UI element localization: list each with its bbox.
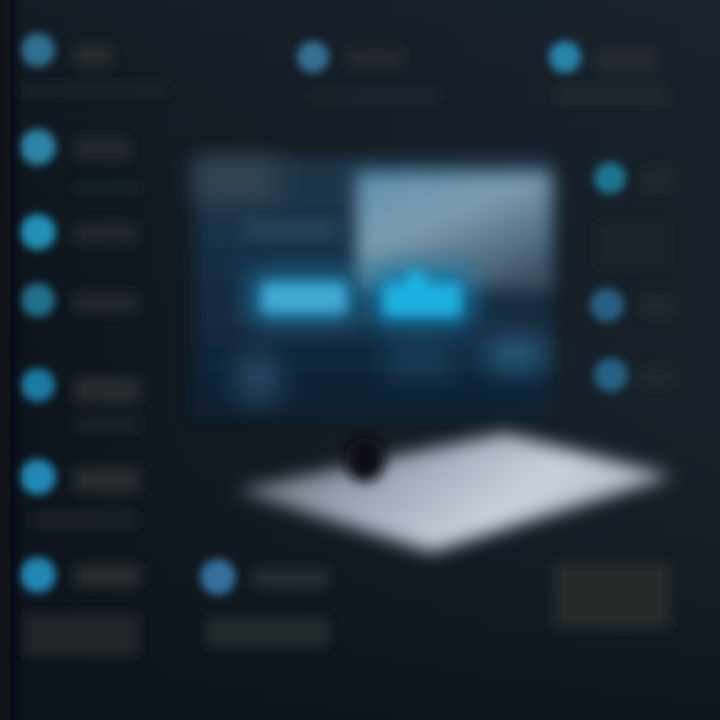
icon: left circle 7	[20, 557, 56, 593]
icon: left circle 5	[21, 368, 55, 402]
icon: right circle 2	[590, 288, 624, 322]
bright bar one glow	[250, 272, 358, 324]
monitor left top corner	[196, 160, 276, 200]
icon: left circle 3	[20, 214, 56, 250]
screen upper text row	[242, 222, 338, 238]
left edge shadow	[0, 0, 10, 720]
icons: blue circles	[20, 33, 628, 595]
icon: bottom circle	[200, 559, 236, 595]
icon: dark object on tablet	[345, 438, 385, 482]
screen glare panel	[356, 172, 552, 290]
bright bar one	[262, 283, 346, 313]
bright bar two	[384, 270, 460, 316]
icon: left circle 6	[20, 459, 56, 495]
icon: left circle 1	[21, 33, 55, 67]
icon: left circle 2	[20, 129, 56, 165]
panel: top and right text placeholders	[312, 47, 673, 387]
icon: tablet surface	[236, 433, 672, 552]
panel: monitor screen	[195, 158, 552, 416]
icon: right circle 1	[594, 162, 626, 194]
icon: top circle 2	[549, 41, 581, 73]
icon: left circle 4	[21, 283, 55, 317]
screen lower blocks	[238, 338, 545, 400]
panel: left column text placeholders	[20, 44, 170, 656]
icon: right circle 3	[594, 358, 628, 392]
panel: bottom text placeholders	[207, 562, 670, 647]
bright bar two glow	[372, 268, 472, 326]
icon: top circle 1	[297, 41, 329, 73]
